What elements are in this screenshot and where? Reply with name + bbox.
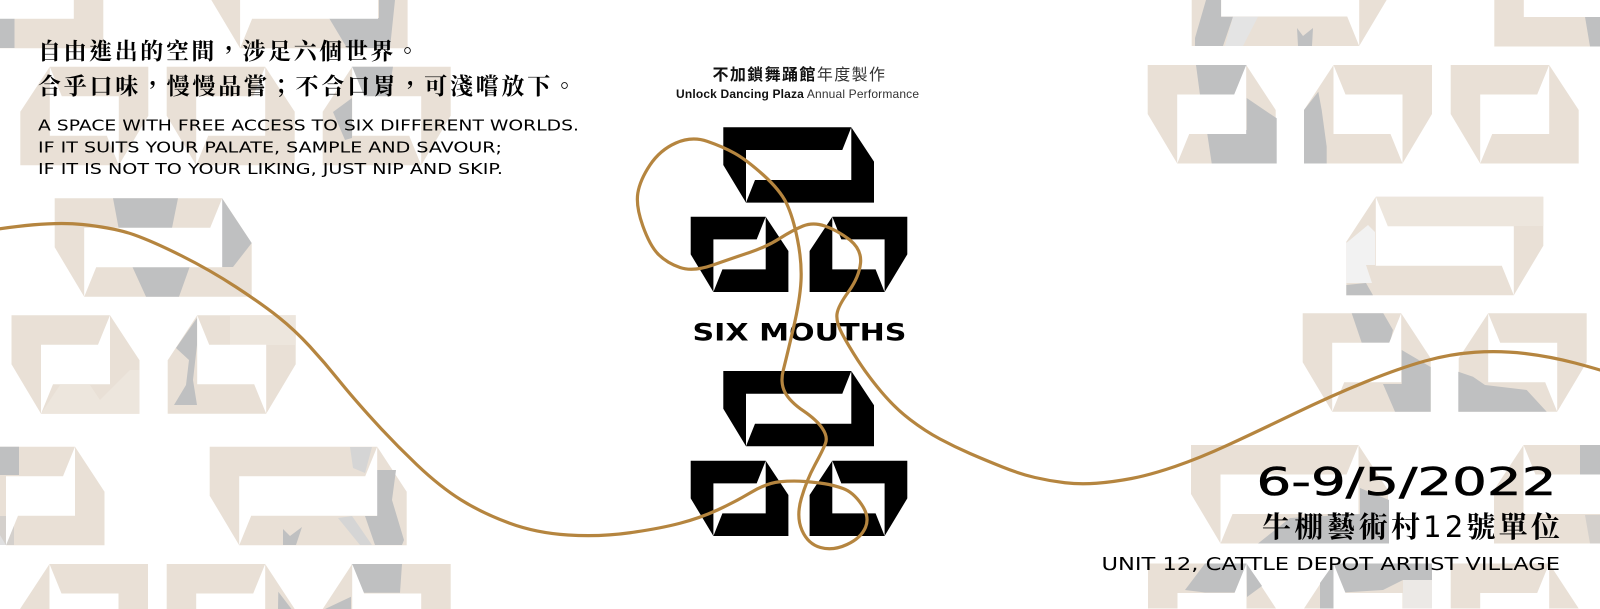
logo: six mouths glyph <box>691 127 907 536</box>
date and venue block <box>1102 460 1560 575</box>
logo mouth: lower left <box>691 461 788 536</box>
presenter english: Unlock Dancing Plaza Annual Performance <box>676 87 919 101</box>
english intro line 2: IF IT SUITS YOUR PALATE, SAMPLE AND SAVOUR; <box>38 138 502 156</box>
mouth: top left 2 <box>211 0 408 48</box>
venue chinese: 牛棚藝術村12號單位 <box>1262 510 1560 544</box>
mouth: bottom right a <box>1148 564 1276 608</box>
mouth: right row 5 a <box>1191 445 1389 544</box>
english intro line 3: IF IT IS NOT TO YOUR LIKING, JUST NIP AND SKIP. <box>38 160 503 178</box>
logo title: SIX MOUTHS: SIX MOUTHS <box>692 318 906 346</box>
mouth: left row 2 c <box>323 67 451 165</box>
logo mouth: upper left <box>691 217 788 292</box>
mouth: top left <box>0 0 103 48</box>
mouth: left row 2 b <box>167 67 295 165</box>
mouth: bottom right b <box>1304 564 1432 608</box>
presenter chinese: 不加鎖舞踊館年度製作 <box>712 65 885 84</box>
mouth: left row 5 b <box>210 447 407 545</box>
mouth: right row 2 c <box>1451 65 1579 164</box>
intro text block <box>38 39 579 178</box>
mouth: bottom left a <box>20 564 148 609</box>
mouth: right row 4 b <box>1458 313 1587 412</box>
mouth: bottom left b <box>167 564 295 609</box>
chinese intro line 1: 自由進出的空間，涉足六個世界。 <box>38 39 419 64</box>
mouth: right row 4 a <box>1303 313 1431 412</box>
mouth: top right a <box>1192 0 1389 46</box>
mouth: right row 5 b <box>1494 445 1600 544</box>
presenter credit <box>676 65 919 101</box>
gold winding line <box>0 139 1600 549</box>
chinese intro line 2: 合乎口味，慢慢品嘗；不合口胃，可淺嚐放下。 <box>38 73 576 99</box>
mouth: left row 4 a <box>12 315 140 414</box>
mouth: left row 5 a <box>0 447 104 545</box>
mouth: left row 2 a <box>20 67 148 165</box>
mouth: right row 3 <box>1346 197 1543 295</box>
logo mouth: lower top <box>723 371 874 446</box>
logo mouth: lower right <box>810 461 907 536</box>
mouth: right row 2 a <box>1148 65 1277 164</box>
mouth: right row 2 b <box>1304 65 1432 164</box>
venue english: UNIT 12, CATTLE DEPOT ARTIST VILLAGE <box>1102 554 1560 575</box>
logo mouth: upper right <box>810 217 907 292</box>
logo mouth: upper top <box>723 127 874 203</box>
mouth: left row 4 b <box>168 315 296 414</box>
mouth: bottom left c <box>323 564 451 609</box>
mouth: bottom right c <box>1451 564 1579 608</box>
english intro line 1: A SPACE WITH FREE ACCESS TO SIX DIFFERENT WORLDS. <box>38 116 579 134</box>
mouth: top right b <box>1494 0 1600 46</box>
date: 6-9/5/2022 <box>1256 460 1556 504</box>
mouth: left row 3 <box>55 198 252 297</box>
